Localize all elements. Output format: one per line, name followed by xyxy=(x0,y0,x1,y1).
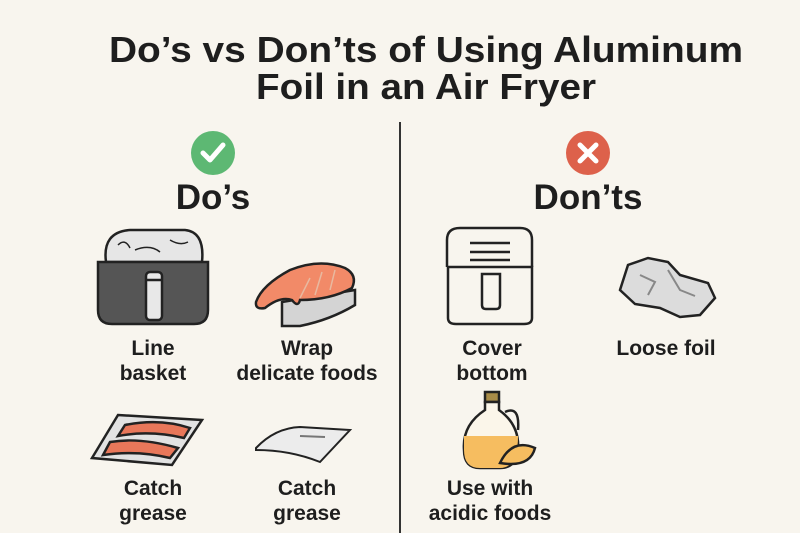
label: Line basket: basket xyxy=(120,362,186,385)
label: Line basket xyxy=(120,337,186,385)
icon: crumpled foil xyxy=(620,258,715,317)
heading: Don'ts: Don’ts xyxy=(534,178,642,217)
label: Catch grease 2 xyxy=(273,477,341,525)
label: Catch grease xyxy=(119,477,187,525)
label: Wrap delicate foods: Wrap xyxy=(281,337,333,360)
label: Cover bottom: Cover xyxy=(462,337,522,360)
label: Use with acidic foods: Use with xyxy=(447,477,533,500)
label: Catch grease 2: grease xyxy=(273,502,341,525)
label: Cover bottom: bottom xyxy=(456,362,528,385)
title xyxy=(109,29,743,107)
label: Use with acidic foods xyxy=(429,477,551,525)
label: Catch grease: grease xyxy=(119,502,187,525)
icon: basket with foil xyxy=(98,230,208,324)
icon: air fryer outline xyxy=(447,228,532,324)
label: Loose foil: Loose foil xyxy=(616,337,716,360)
label: Use with acidic foods: acidic foods xyxy=(429,502,551,525)
icon: foil sheet xyxy=(256,427,350,462)
label: Line basket: Line xyxy=(131,337,175,360)
icon: bacon tray xyxy=(92,415,202,465)
icon: red x xyxy=(566,131,610,175)
label: Wrap delicate foods: delicate foods xyxy=(236,362,378,385)
label: Cover bottom xyxy=(456,337,528,385)
title: Foil in an Air Fryer xyxy=(256,66,596,107)
title: Do’s vs Don’ts of Using Aluminum xyxy=(109,29,743,70)
icon: green check xyxy=(191,131,235,175)
heading: Do's: Do’s xyxy=(176,178,250,217)
label: Catch grease: Catch xyxy=(124,477,182,500)
label: Catch grease 2: Catch xyxy=(278,477,336,500)
icon: oil bottle with lemon xyxy=(464,392,535,468)
icon: salmon xyxy=(256,263,355,326)
label: Wrap delicate foods xyxy=(236,337,378,385)
